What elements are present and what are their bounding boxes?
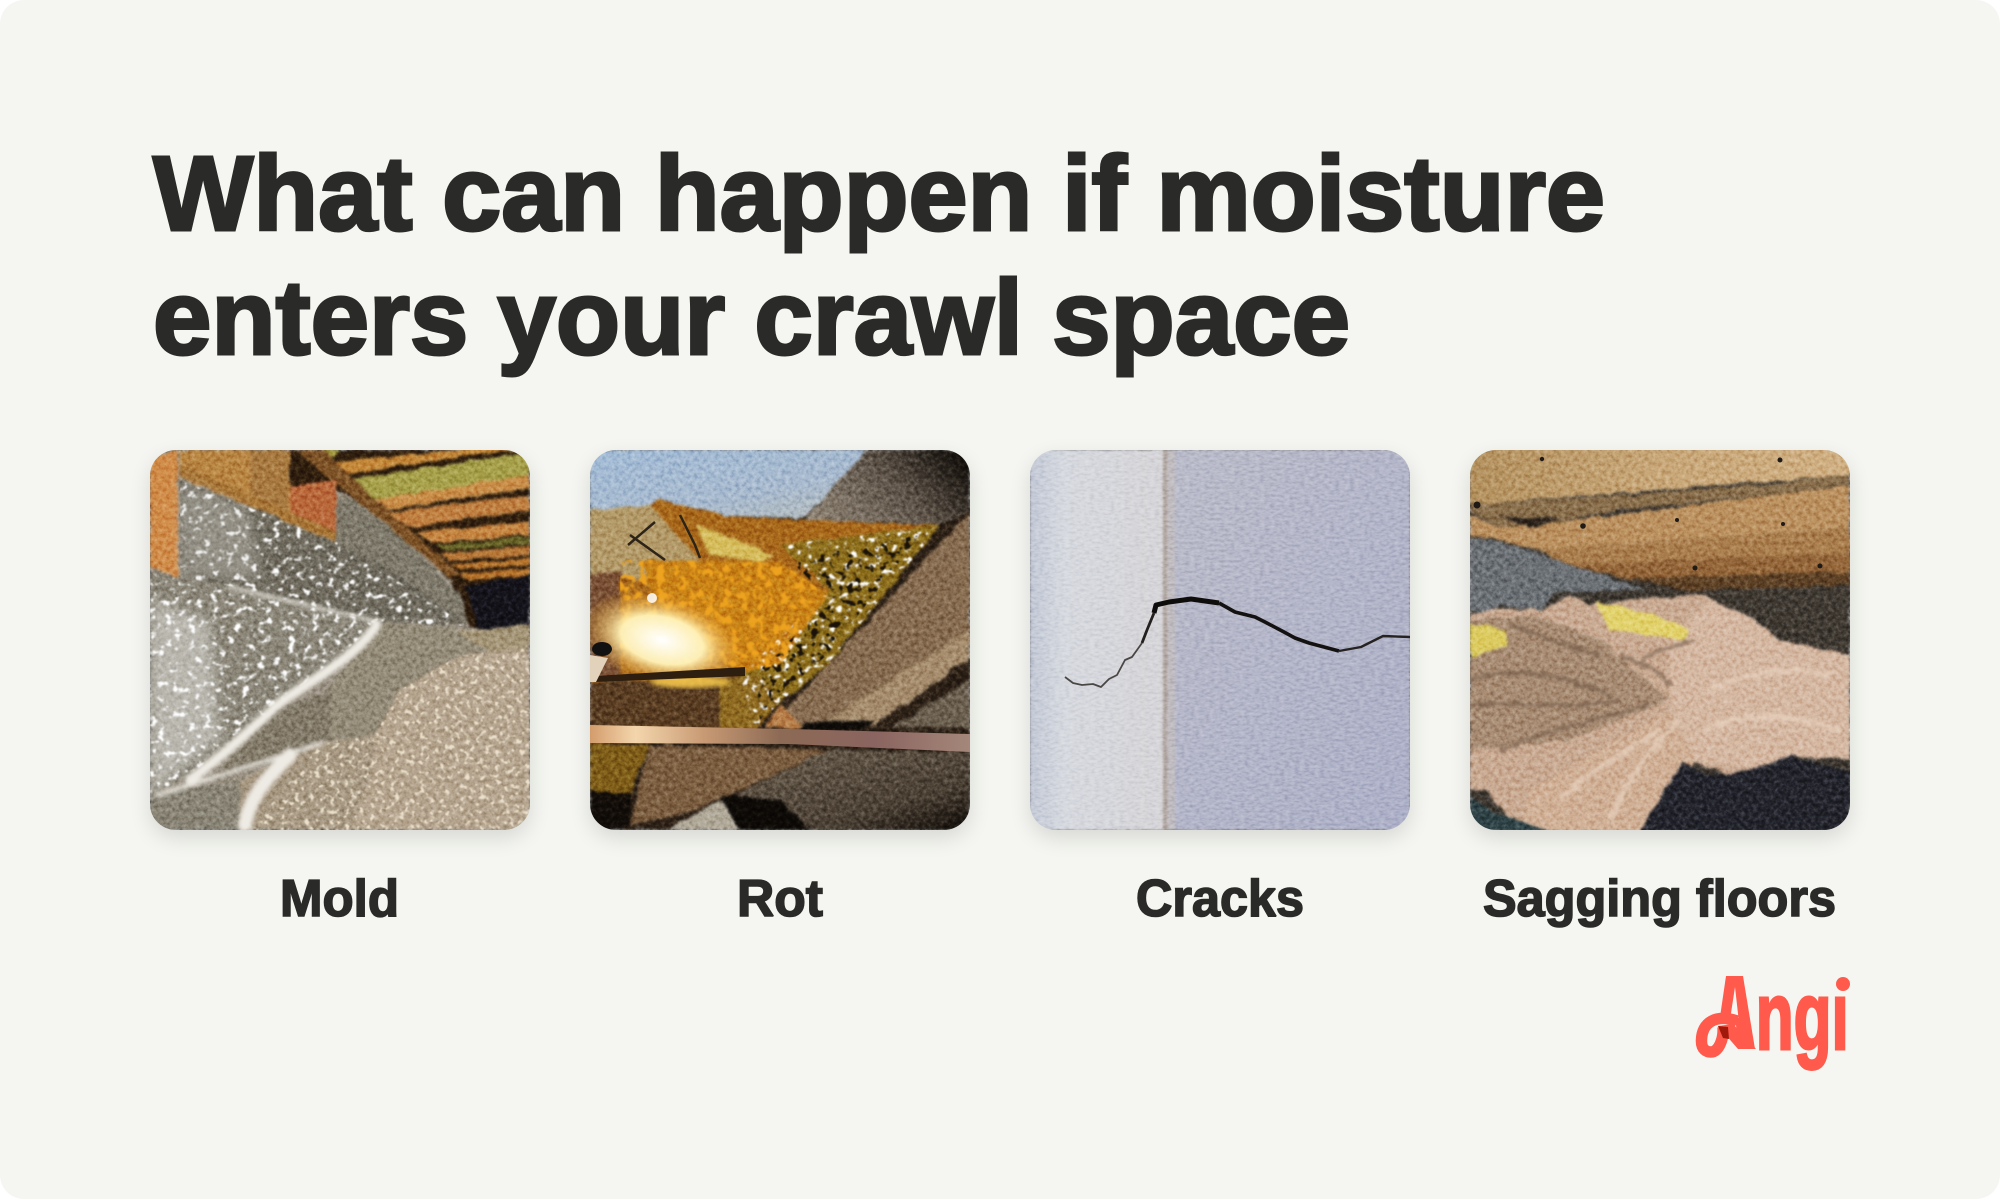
photo: rotted wood and joists <box>569 450 970 830</box>
panel: mold <box>150 448 530 838</box>
photo: cracked wall <box>1030 450 1410 830</box>
panel: sagging floors <box>1470 448 1852 838</box>
panel: rot <box>569 450 970 838</box>
title: enters your crawl space <box>153 259 1350 377</box>
panel: cracks <box>1030 450 1410 838</box>
photo: sagging insulation under joists <box>1470 448 1852 832</box>
logo: Angi: Angi <box>1711 962 1849 1070</box>
label: mold: Mold <box>280 870 399 928</box>
title <box>153 135 1605 377</box>
label: cracks: Cracks <box>1136 870 1304 928</box>
label: sagging floors: Sagging floors <box>1483 870 1836 928</box>
title: What can happen if moisture <box>153 135 1605 253</box>
photo: mold on crawl space wall <box>150 448 530 830</box>
label: rot: Rot <box>737 870 823 928</box>
crack <box>1065 599 1410 687</box>
